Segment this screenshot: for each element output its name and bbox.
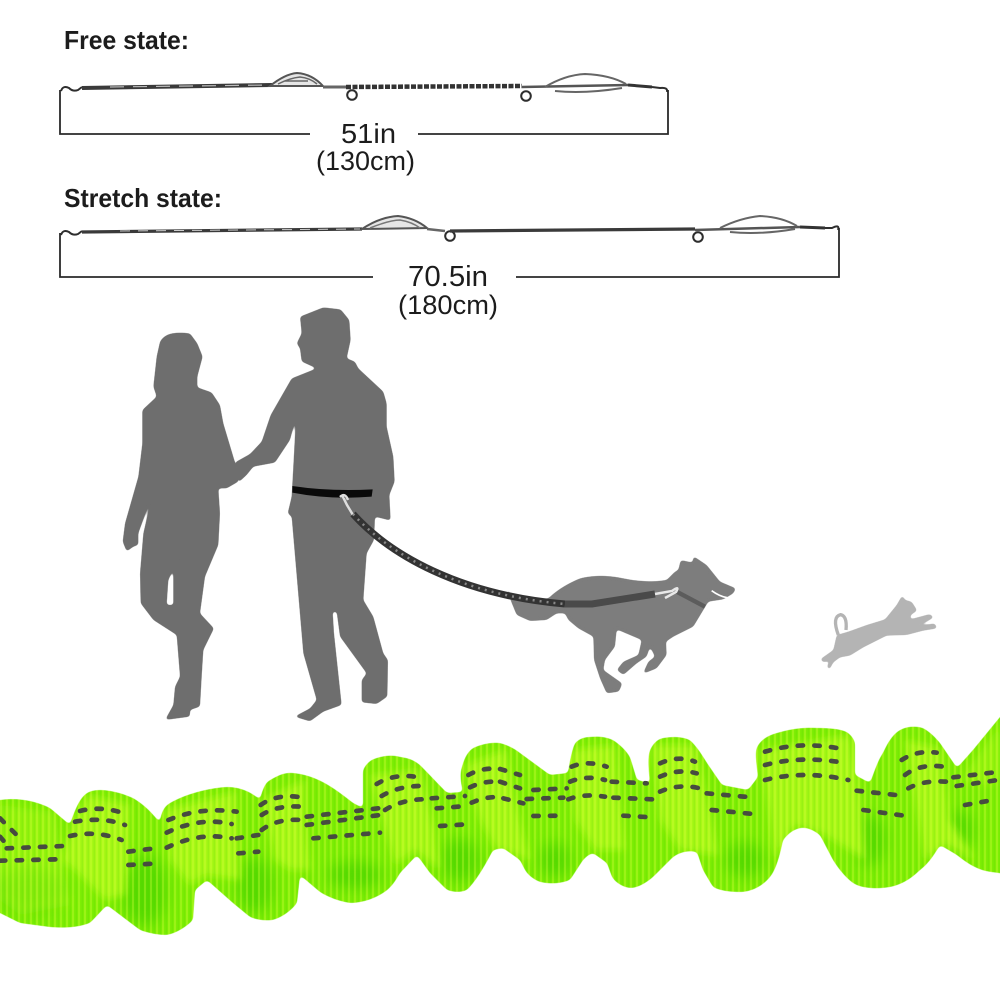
bungee cord — [353, 514, 565, 604]
dog clip — [655, 588, 677, 598]
illustration: man silhouette — [235, 307, 395, 721]
label: 51in (130cm) — [316, 118, 415, 176]
label: 70.5in (180cm) — [398, 261, 498, 320]
dog mouth — [712, 591, 727, 598]
illustration: running dog silhouette — [505, 556, 736, 693]
label: 51in (130cm): 51in — [341, 118, 396, 149]
leash drawing: free state — [61, 73, 667, 101]
belt clip — [340, 495, 353, 515]
label: 70.5in (180cm): 70.5in — [408, 261, 488, 293]
leash drawing: stretch state — [61, 216, 838, 242]
raised band highlights — [0, 725, 1000, 915]
leash: bungee with clips from belt to dog — [340, 495, 677, 604]
yellow rib texture — [0, 718, 1000, 935]
dimension line: free state 51in — [60, 90, 668, 134]
strap on dog back — [565, 594, 655, 604]
dimension line: stretch state 70.5in — [60, 228, 839, 277]
reflective stitching, right half — [500, 745, 1000, 817]
webbing base — [0, 716, 1000, 936]
dark valley shading — [0, 810, 974, 926]
reflective stitching, left half — [0, 769, 500, 865]
label: 70.5in (180cm): (180cm) — [398, 290, 498, 320]
cat tail — [835, 615, 846, 635]
label: 51in (130cm): (130cm) — [316, 146, 415, 176]
heading: Free state: Free state: — [64, 25, 189, 55]
dog collar — [677, 592, 705, 607]
illustration: leaping cat silhouette — [820, 595, 937, 670]
heading: Stretch state: Stretch state: — [64, 183, 222, 213]
illustration: woman silhouette — [123, 333, 242, 720]
waist belt — [292, 486, 373, 498]
photo: green bungee webbing close-up — [0, 716, 1000, 936]
